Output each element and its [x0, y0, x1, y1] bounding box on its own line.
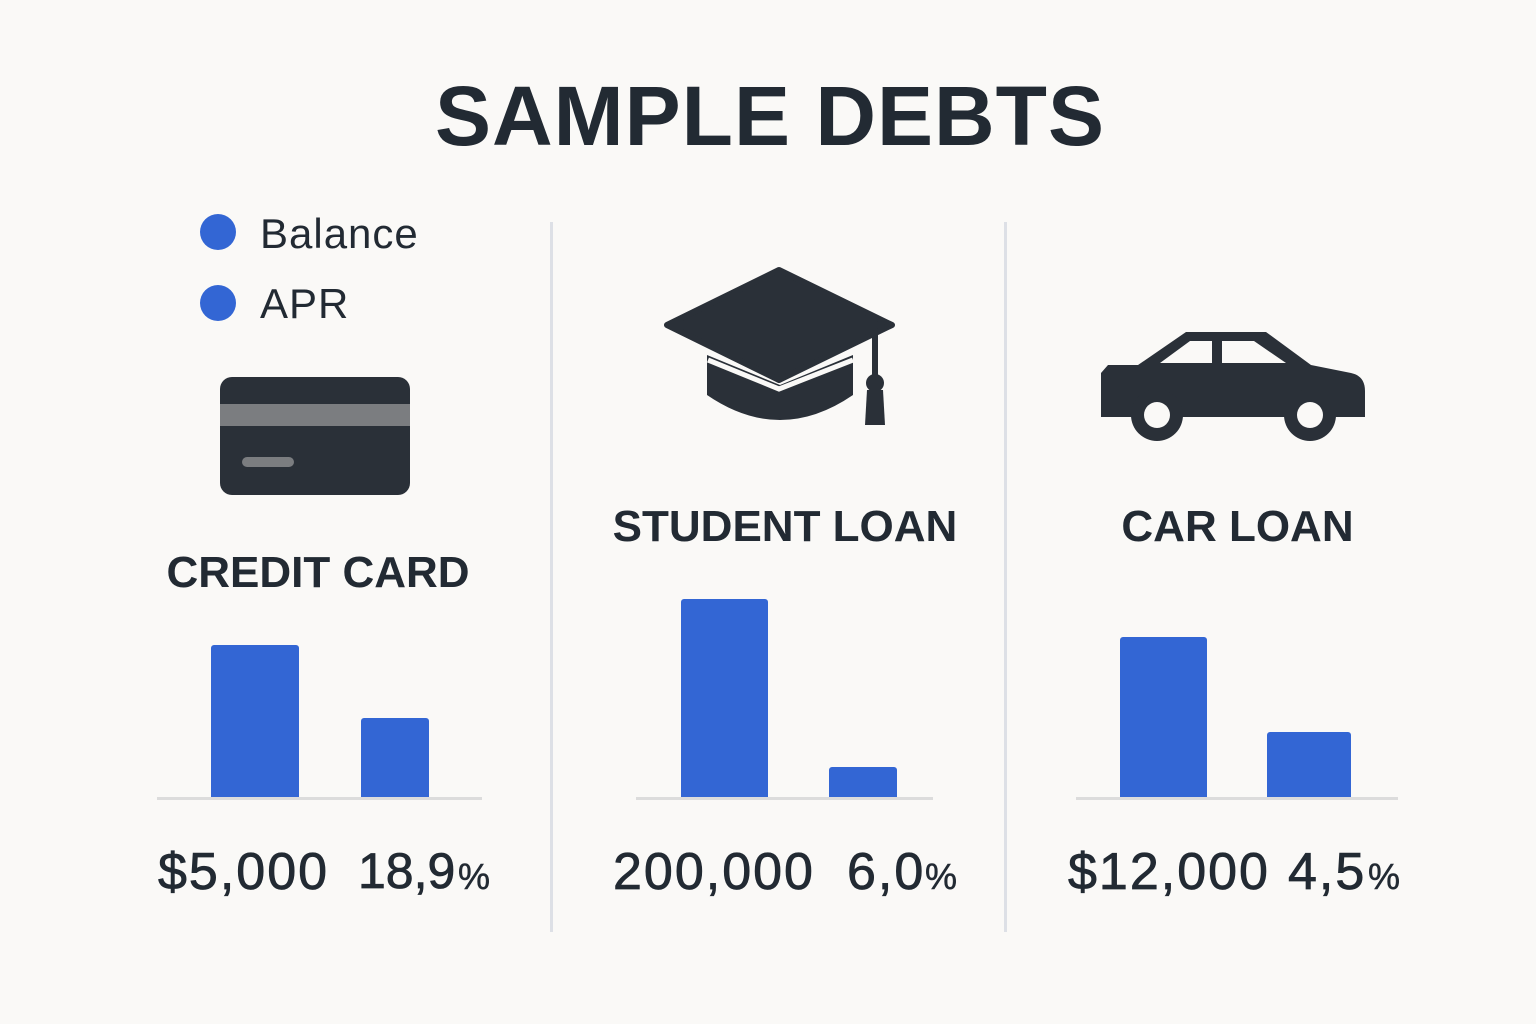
values: student loan: 6,0: [847, 843, 925, 901]
values: car loan: 4,5: [1288, 843, 1366, 901]
values: car loan: %: [1368, 856, 1400, 897]
panel: credit card: [157, 377, 482, 800]
values: student loan: %: [925, 856, 957, 897]
values: car loan: [1068, 843, 1400, 901]
values: car loan: $12,000: [1068, 843, 1270, 901]
panel: student loan: [613, 267, 957, 800]
bar chart: [636, 599, 933, 800]
icon: credit card: [220, 377, 410, 495]
values: credit card: 18,9: [358, 843, 455, 899]
bar chart: [1076, 637, 1398, 800]
values: credit card: [158, 843, 490, 901]
bar chart: [157, 645, 482, 800]
icon: graduation cap: [664, 267, 895, 425]
icon: car: [1101, 332, 1365, 441]
panel: car loan: [1076, 332, 1398, 800]
legend: APR: [260, 280, 349, 327]
legend: Balance: [260, 210, 419, 257]
title: SAMPLE DEBTS: [435, 69, 1105, 163]
heading: STUDENT LOAN: [613, 502, 957, 551]
values: credit card: %: [458, 856, 490, 897]
values: credit card: $5,000: [158, 843, 329, 901]
heading: CREDIT CARD: [166, 548, 470, 597]
heading: CAR LOAN: [1121, 502, 1354, 551]
legend: [200, 210, 419, 327]
values: student loan: [613, 843, 957, 901]
values: student loan: 200,000: [613, 843, 815, 901]
